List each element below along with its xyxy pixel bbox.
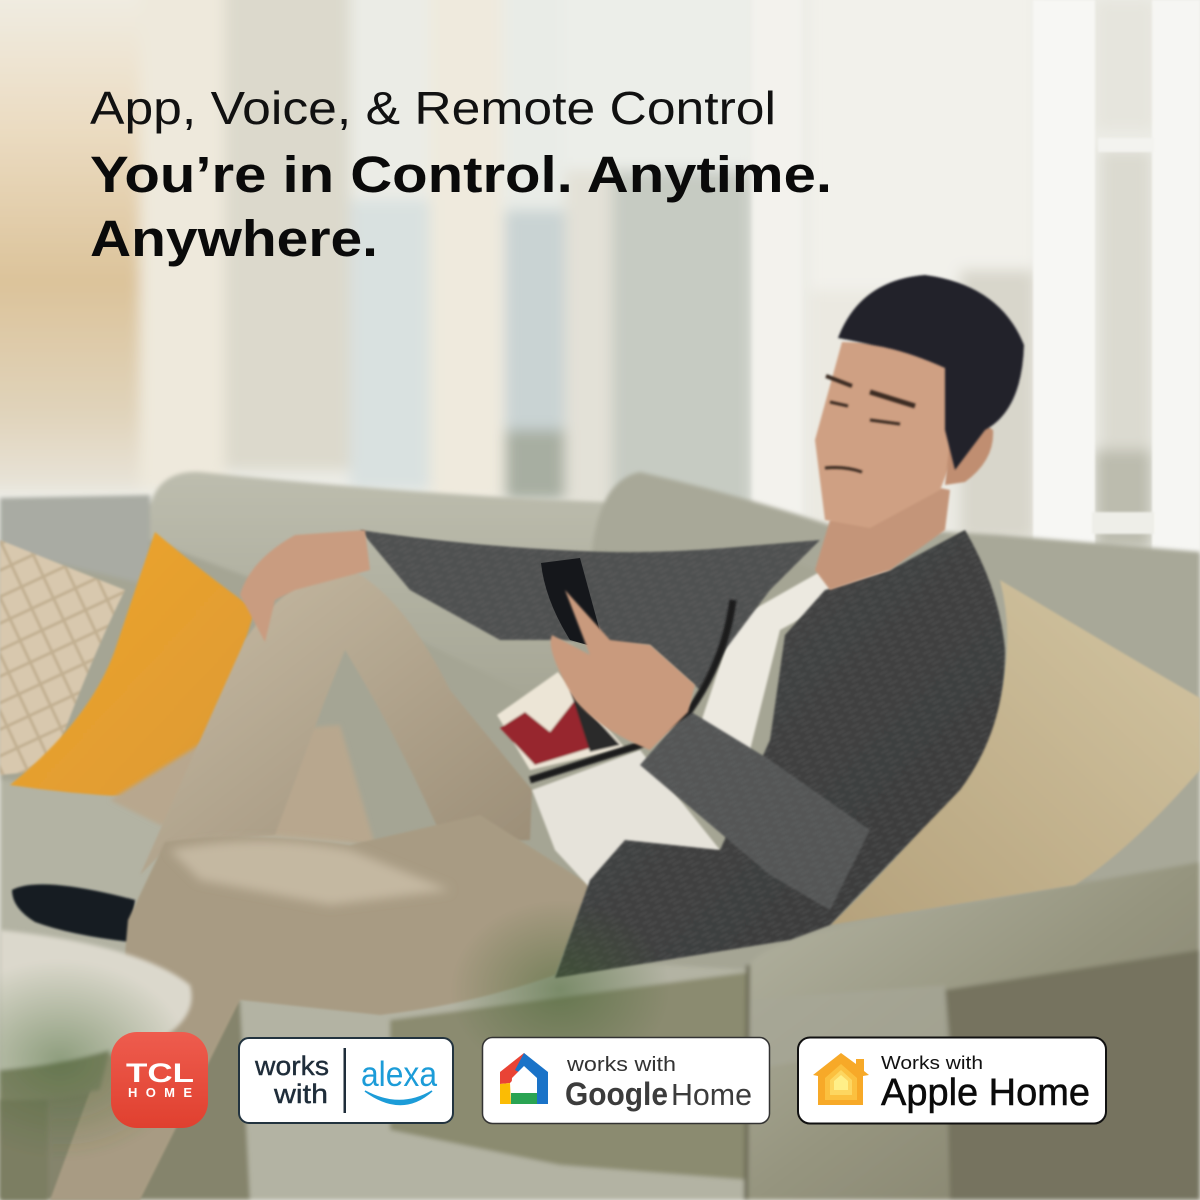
badge: works with Google Home — [482, 1038, 770, 1124]
sofa back cushion left — [0, 495, 150, 585]
badge: works with Apple Home: Works with — [881, 1053, 983, 1073]
sofa base — [0, 525, 1200, 1200]
sofa back cushion middle — [150, 472, 605, 710]
ear — [945, 424, 993, 485]
pillow: patterned — [110, 725, 375, 845]
neck — [815, 480, 950, 590]
head — [815, 342, 960, 528]
heading line: bold 2: Anywhere. — [90, 210, 378, 267]
sofa seat — [0, 780, 750, 1200]
hair — [838, 275, 1024, 470]
eyes and mouth — [825, 376, 915, 472]
hoodie: raised sleeve — [360, 530, 820, 690]
hoodie: forearm — [640, 710, 870, 910]
badge: TCL Home app icon: HOME — [128, 1085, 192, 1100]
right hand holding phone — [551, 590, 695, 750]
trousers: lower leg — [50, 815, 590, 1200]
heading line: bold 1: You’re in Control. Anytime. — [90, 146, 832, 203]
badge: works with Apple Home — [798, 1038, 1106, 1124]
pillow: beige right — [830, 580, 1200, 925]
hoodie: body — [555, 530, 1005, 978]
badge: works with Apple Home: Apple Home — [881, 1072, 1090, 1114]
icon: Apple Home house — [813, 1053, 869, 1105]
sofa lower left dark — [0, 1000, 250, 1200]
badge: works with Alexa: with — [273, 1079, 328, 1109]
table: foreground round table — [0, 930, 192, 1200]
badge: works with Alexa: works — [254, 1051, 329, 1081]
heading line: subtitle: App, Voice, & Remote Control — [90, 82, 776, 134]
badge: works with Google Home: Google — [565, 1076, 668, 1112]
trousers: raised leg — [140, 567, 532, 875]
green glow at sofa centre — [450, 900, 670, 1080]
badge: works with Google Home: works with — [566, 1054, 676, 1076]
sock — [12, 884, 135, 942]
left hand on knee — [240, 530, 370, 642]
badge: works with Google Home: Home — [671, 1077, 752, 1112]
sofa arm — [745, 862, 1200, 1200]
sofa back cushion right — [592, 472, 1200, 880]
hoodie drawstring — [530, 600, 733, 780]
pillow: orange — [10, 532, 255, 798]
pillow: red and black patterned — [497, 672, 625, 770]
heading — [90, 82, 832, 267]
badge: works with Alexa: alexa — [361, 1055, 437, 1094]
man — [12, 275, 1024, 1200]
sofa front seat — [390, 972, 750, 1180]
pillow: knit cream — [0, 540, 125, 775]
icon: Google Home house — [500, 1053, 548, 1104]
badge: TCL Home app icon — [111, 1032, 208, 1128]
badge: works with Alexa — [239, 1038, 453, 1123]
badge: TCL Home app icon: TCL — [126, 1058, 194, 1088]
white t-shirt — [532, 750, 720, 888]
phone — [541, 558, 605, 650]
photo: sofa — [0, 472, 1200, 1200]
